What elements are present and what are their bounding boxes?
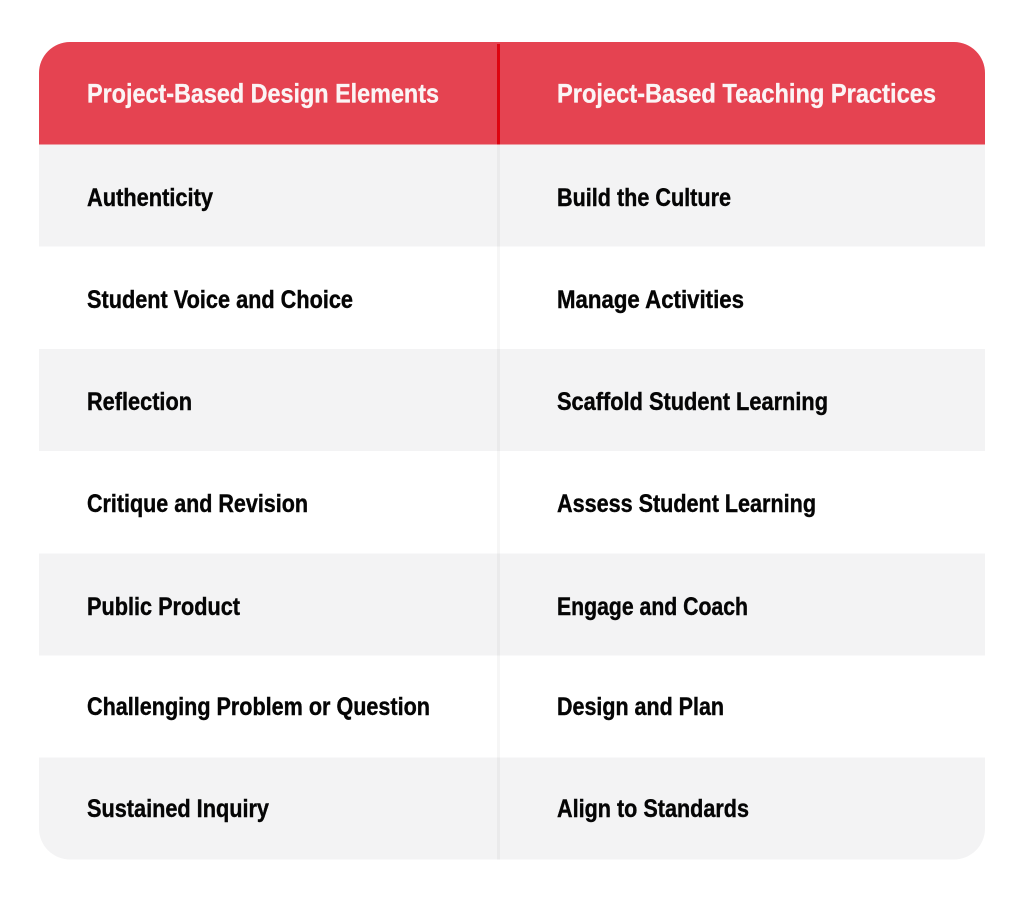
practice: align to standards: Align to Standards — [557, 795, 749, 823]
row 6 — [88, 696, 723, 720]
heading: design elements: Project-Based Design Elements — [87, 78, 439, 108]
header divider — [497, 44, 500, 144]
practice: design and plan: Design and Plan — [557, 693, 724, 721]
practice: engage and coach: Engage and Coach — [557, 593, 748, 621]
practice: assess student learning: Assess Student Learning — [557, 490, 816, 518]
element: critique and revision: Critique and Revision — [87, 490, 308, 518]
practice: scaffold student learning: Scaffold Student Learning — [557, 388, 828, 416]
row 1 background — [39, 144, 985, 246]
element: reflection: Reflection — [87, 388, 192, 416]
row 7 — [39, 758, 985, 860]
header background — [39, 42, 985, 144]
header row — [39, 42, 985, 144]
row 3 — [39, 349, 985, 451]
practice: manage activities: Manage Activities — [557, 286, 744, 314]
row 1 — [39, 144, 985, 246]
heading: teaching practices: Project-Based Teaching Practices — [557, 78, 936, 108]
row 5 — [39, 554, 985, 656]
row 7 background — [39, 758, 985, 860]
practice: build the culture: Build the Culture — [557, 184, 731, 212]
element: authenticity: Authenticity — [87, 184, 213, 212]
row 4 — [88, 494, 815, 518]
element: student voice and choice: Student Voice and Choice — [87, 286, 353, 314]
element: sustained inquiry: Sustained Inquiry — [87, 795, 269, 823]
row 5 background — [39, 554, 985, 656]
row 3 background — [39, 349, 985, 451]
element: challenging problem or question: Challenging Problem or Question — [87, 693, 430, 721]
column divider — [497, 144, 500, 860]
element: public product: Public Product — [87, 593, 241, 621]
row 2 — [87, 290, 744, 314]
